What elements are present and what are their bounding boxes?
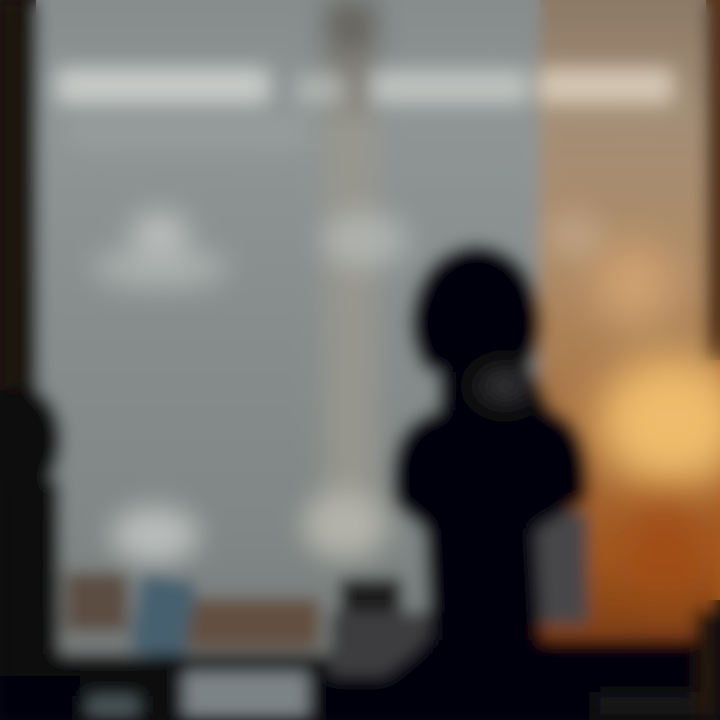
faint subtitle band	[70, 122, 310, 144]
title: illegible blurred band	[56, 68, 674, 104]
light collar patch	[477, 370, 533, 402]
silhouette: central person	[330, 244, 589, 720]
silhouette: person at left	[0, 386, 62, 720]
lamp glow	[595, 243, 720, 600]
foreground objects by person	[330, 512, 588, 676]
table and objects	[0, 572, 720, 720]
left and right window frame	[0, 0, 720, 390]
cloud shapes: faint icons	[92, 212, 605, 563]
lower dark foreground	[0, 610, 720, 720]
window mullion	[326, 0, 376, 510]
